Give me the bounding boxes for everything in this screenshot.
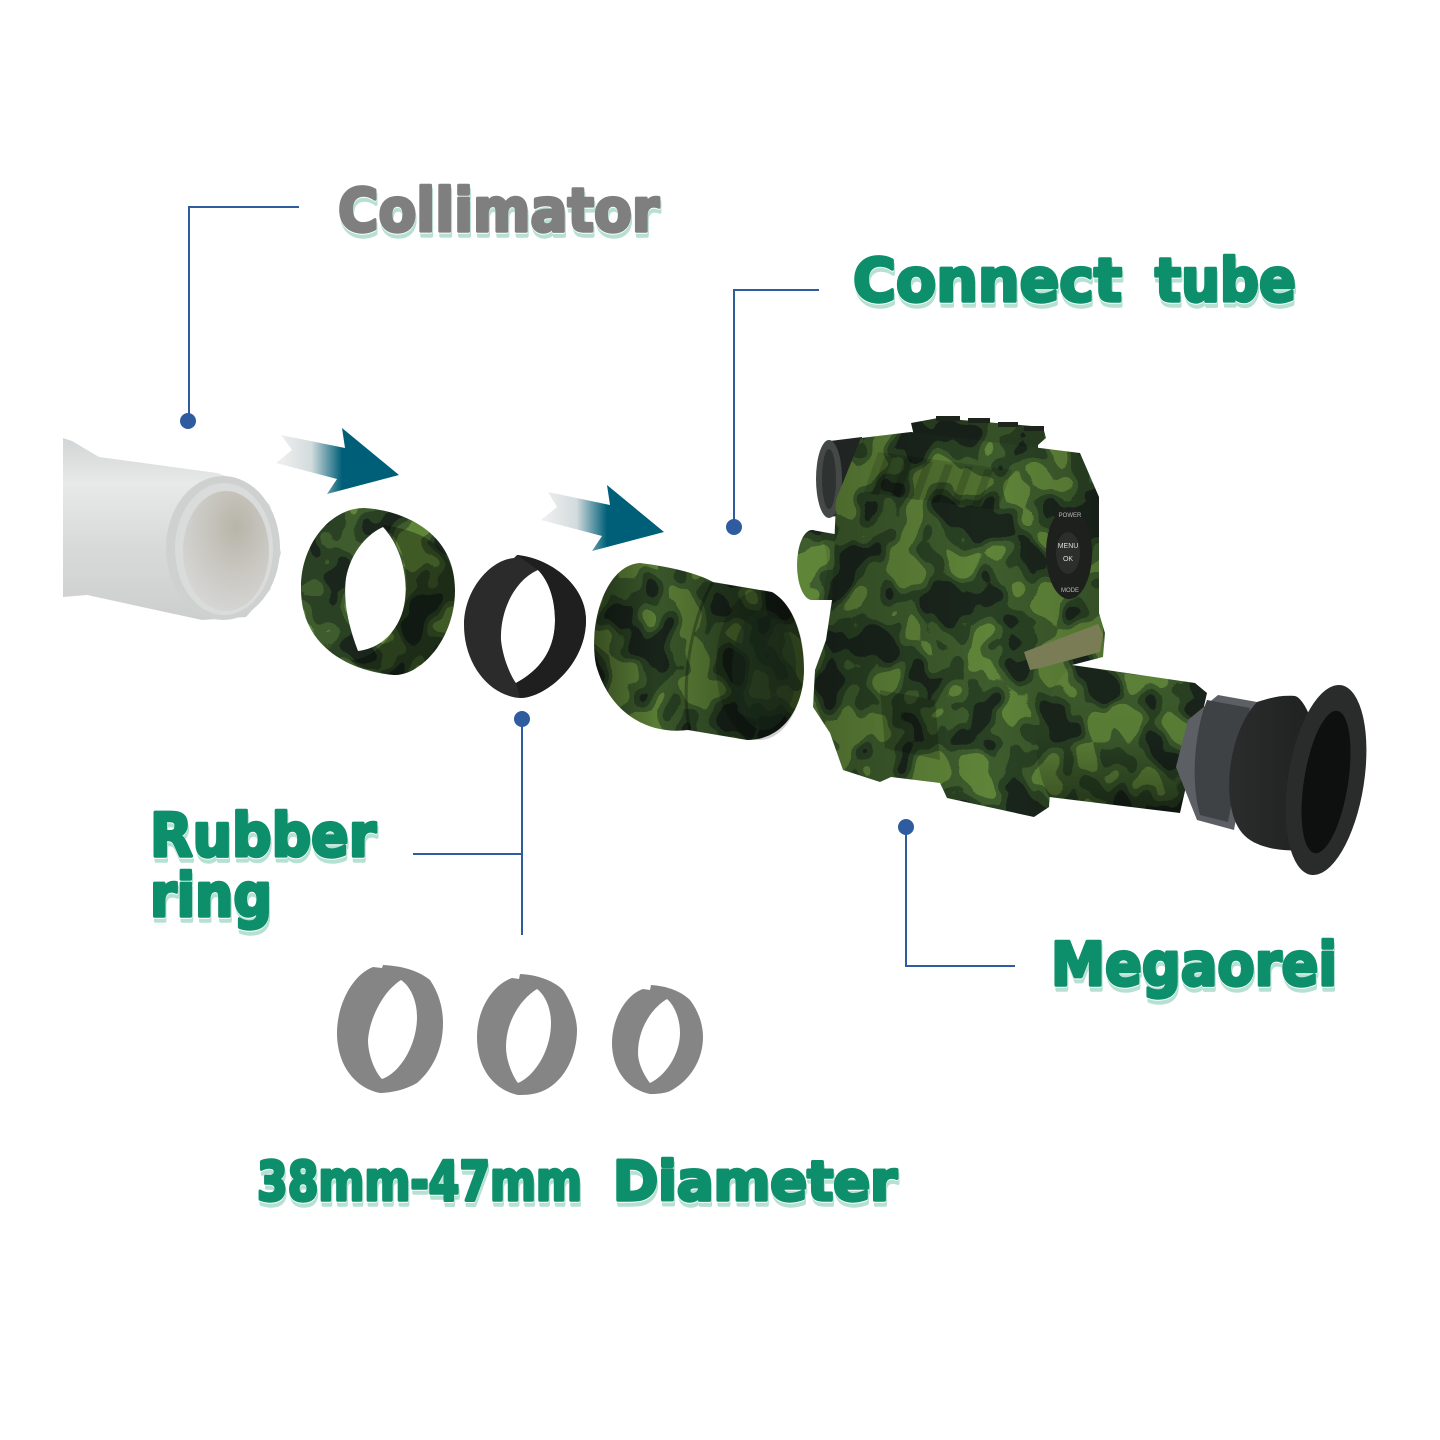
label: Connect tube: Connect: [853, 246, 1122, 316]
megaorei leader line: [898, 819, 1015, 966]
collimator scope: [63, 438, 281, 620]
connect tube: [594, 563, 804, 740]
lens face: [183, 491, 269, 611]
front upper lens: [816, 437, 862, 518]
lower dial: [880, 690, 940, 760]
label: Rubber ring: ring: [150, 861, 272, 931]
gray spacer ring medium: [477, 974, 577, 1095]
control button cluster: MENU: [1058, 543, 1078, 550]
label: Rubber ring: [150, 801, 376, 931]
tube opening: [716, 590, 804, 740]
top vent ribs: [864, 452, 1012, 510]
label: diameter range: Diameter: [613, 1150, 897, 1213]
focus knob: [797, 530, 840, 600]
control button cluster: [1046, 507, 1092, 599]
tan strap: [1024, 624, 1103, 670]
device body: [813, 432, 1105, 817]
mounting rail: [911, 416, 1046, 452]
label: diameter range: 38mm-47mm: [257, 1150, 582, 1213]
label: Connect tube: [853, 246, 1296, 316]
black rubber ring: [464, 555, 586, 698]
rubber eye cup: [1229, 679, 1379, 881]
label: diameter range: [257, 1150, 897, 1213]
collimator leader line: [180, 207, 299, 429]
label: Connect tube: tube: [1155, 246, 1296, 316]
arrow: second assembly direction: [541, 485, 664, 551]
label: Megaorei: Megaorei: [1051, 930, 1337, 1000]
control button cluster: POWER: [1059, 513, 1082, 519]
gray spacer ring small: [612, 985, 703, 1094]
night vision device: [797, 416, 1379, 881]
control button cluster: MODE: [1061, 588, 1079, 594]
rubber ring leader line: [413, 711, 530, 935]
sight tube: [1037, 665, 1207, 813]
arrow: first assembly direction: [276, 428, 399, 494]
ring opening: [345, 527, 406, 651]
gray spacer ring large: [337, 965, 443, 1093]
label: Collimator: Collimator: [338, 176, 659, 246]
camo ring: [301, 508, 455, 675]
eyepiece focus ring: [1176, 695, 1257, 830]
connect tube leader line: [726, 290, 819, 535]
control button cluster: OK: [1063, 556, 1073, 563]
flange step: [686, 582, 713, 730]
label: Rubber ring: Rubber: [150, 801, 376, 871]
